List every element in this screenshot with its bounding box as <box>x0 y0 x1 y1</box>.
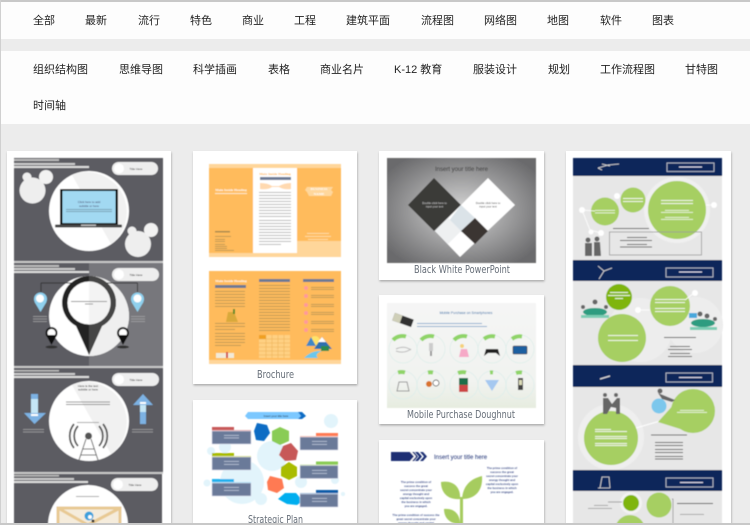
navigation rows: sub categories: 规划 <box>548 64 570 76</box>
navigation row: main categories: 流程图 <box>421 15 454 27</box>
panel: laptop: subtitle or here <box>79 204 99 208</box>
diamonds: Double click here to <box>422 201 447 205</box>
card: Strategic Plan: Insert your title here <box>264 414 289 418</box>
panel: laptop: Title Here <box>130 167 143 171</box>
brochure page one: BUSINESS <box>311 187 328 191</box>
panel: laptop <box>14 158 163 261</box>
brochure page two <box>209 271 341 364</box>
navigation rows: sub categories: K-12 教育 <box>394 64 442 76</box>
navigation rows: sub categories: 时间轴 <box>33 100 66 112</box>
diamonds <box>408 178 515 257</box>
text blocks: energy thought and <box>489 478 515 482</box>
navigation rows: sub categories: 科学插画 <box>193 64 237 76</box>
navigation row: main categories <box>1 2 750 39</box>
text blocks: capital exclusively upon <box>486 482 518 486</box>
brochure page one <box>209 164 341 257</box>
card title: Black White PowerPoint <box>414 263 511 276</box>
slide title: Insert your title here <box>435 167 489 173</box>
navigation row: main categories: 图表 <box>652 15 674 27</box>
plant <box>441 476 482 525</box>
card: Strategic Plan <box>193 400 357 525</box>
text blocks: secret concentrate your <box>486 474 519 478</box>
panel: signal tower with arrows: Here is the text <box>78 384 98 388</box>
text blocks: The prime condition of success the <box>393 513 440 517</box>
navigation row: main categories: 全部 <box>33 15 55 27</box>
navigation row: main categories: 建筑平面 <box>346 15 390 27</box>
navigation rows: sub categories: 表格 <box>268 64 290 76</box>
chart title: Mobile Purchase on Smartphones <box>440 311 493 315</box>
text blocks: energy thought and capital <box>398 521 434 525</box>
navigation row: main categories: 特色 <box>190 15 212 27</box>
text blocks: great secret concentrate your <box>396 517 437 521</box>
phone icon <box>392 313 414 327</box>
card: Mobile Purchase Doughnut <box>379 295 544 424</box>
slide title: Insert your title here <box>434 455 488 461</box>
panel: location pins <box>14 261 163 367</box>
navigation rows: sub categories: 思维导图 <box>119 64 163 76</box>
doughnut values <box>393 336 522 373</box>
navigation row: main categories: 地图 <box>547 15 569 27</box>
card title: Brochure <box>257 368 294 381</box>
text blocks: The prime condition of <box>487 466 517 470</box>
hexagons <box>254 423 303 505</box>
panel three <box>573 365 722 470</box>
panel: signal tower with arrows <box>14 366 163 472</box>
text blocks: The prime condition of <box>401 480 431 484</box>
panel two <box>573 260 723 365</box>
panel: signal tower with arrows: Title Here <box>130 378 143 382</box>
panel: location pins: Title Here <box>130 273 143 277</box>
brochure page two: Main Inside Heading <box>215 279 247 283</box>
navigation rows: sub categories: 商业名片 <box>320 64 364 76</box>
diamonds: Double click here to <box>476 201 501 205</box>
navigation row: main categories: 工程 <box>294 15 316 27</box>
text blocks: capital exclusively upon <box>400 496 432 500</box>
brochure page one: NAME <box>314 192 325 196</box>
text blocks: secret concentrate your <box>400 488 433 492</box>
text blocks: energy thought and <box>403 492 429 496</box>
card: Brochure <box>193 151 357 384</box>
product icons <box>396 343 527 392</box>
navigation rows: sub categories: 服装设计 <box>473 64 517 76</box>
bottom scroll edge <box>0 523 750 525</box>
diamonds: input your text <box>426 204 444 208</box>
panel one <box>573 158 722 260</box>
text blocks: you are engaged. <box>404 504 428 508</box>
card: Black White PowerPoint <box>379 151 544 280</box>
banner <box>245 412 306 419</box>
brochure page one: Main Inside Heading <box>215 188 247 192</box>
text blocks: success the great <box>404 484 428 488</box>
navigation row: main categories: 软件 <box>600 15 622 27</box>
navigation rows: sub categories: 甘特图 <box>685 64 718 76</box>
card title: Mobile Purchase Doughnut <box>407 408 515 421</box>
left and right labelled boxes <box>212 427 338 507</box>
card: constellation infographic (column 4) <box>566 151 731 525</box>
panel: envelope: Title Here <box>129 483 142 487</box>
panel: signal tower with arrows: subtitle or here <box>78 388 98 392</box>
text blocks: the business in which <box>487 486 517 490</box>
navigation row: main categories: 最新 <box>85 15 107 27</box>
arrow banner <box>391 452 427 461</box>
panel: laptop: Click here to add <box>78 200 101 204</box>
navigation rows: sub categories <box>1 51 750 124</box>
brochure page one: Main Inside Heading <box>259 172 291 176</box>
text blocks: you are engaged. <box>490 490 514 494</box>
doughnut rings <box>389 335 534 399</box>
text blocks <box>393 466 519 525</box>
diamonds: input your text <box>479 204 497 208</box>
navigation row: main categories: 网络图 <box>484 15 517 27</box>
navigation rows: sub categories: 工作流程图 <box>600 64 655 76</box>
navigation rows: sub categories: 组织结构图 <box>33 64 88 76</box>
text blocks: the business in which <box>401 500 431 504</box>
navigation row: main categories: 流行 <box>138 15 160 27</box>
background bubbles <box>204 414 345 505</box>
text blocks: success the great <box>490 470 514 474</box>
card: plant growth slide <box>379 440 544 525</box>
card: infographic with laptop (column 1) <box>7 151 171 525</box>
navigation row: main categories: 商业 <box>242 15 264 27</box>
panel four <box>573 470 722 525</box>
panel: envelope <box>14 472 163 525</box>
